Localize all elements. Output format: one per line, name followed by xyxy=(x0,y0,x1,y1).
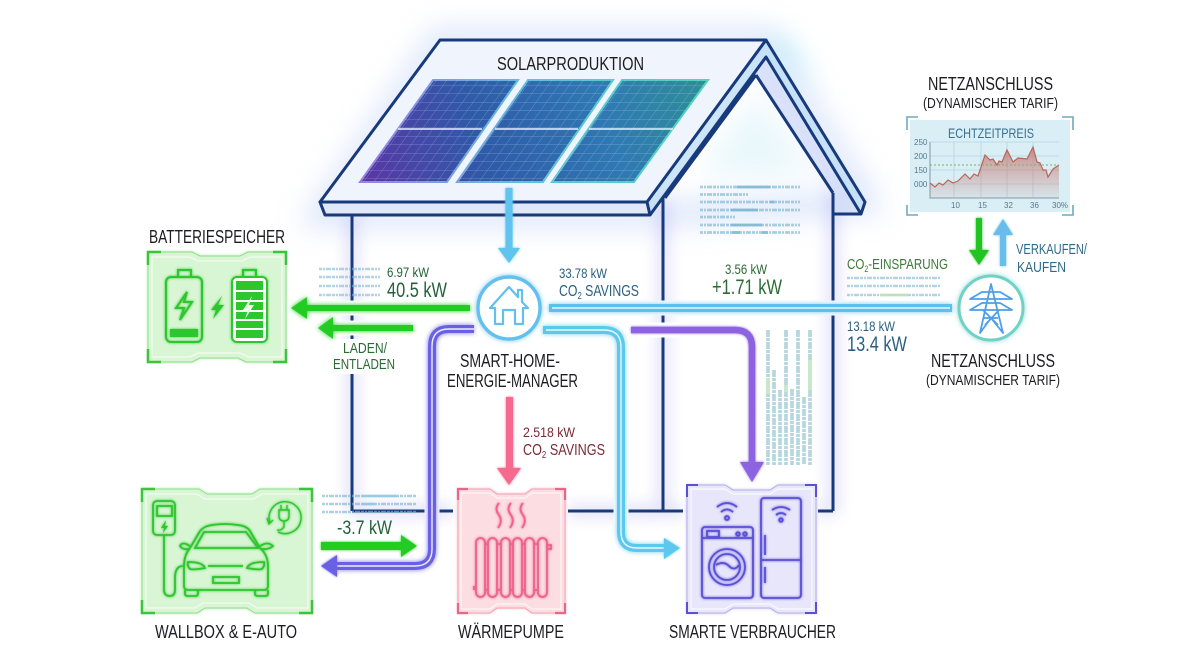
readout: grid: 13.18 kW xyxy=(847,318,896,334)
label: CO2 saving: -EINSPARUNG xyxy=(868,256,948,273)
panel: Batteriespeicher xyxy=(148,227,286,362)
readout: house power xyxy=(712,261,782,299)
pipe: to wallbox indigo xyxy=(336,329,474,566)
panel: Waermepumpe xyxy=(458,489,565,642)
label: grid connection xyxy=(926,351,1060,389)
readout: battery: 40.5 kW xyxy=(387,279,447,302)
readout: CO2 savings red: SAVINGS xyxy=(546,442,605,459)
label: energy manager xyxy=(447,351,578,391)
vertical data bars xyxy=(768,330,810,465)
line chart: 150 xyxy=(914,166,928,175)
label: sell and buy: VERKAUFEN/ xyxy=(1016,241,1088,258)
solar panels xyxy=(360,80,708,182)
icon: wifi left xyxy=(717,503,737,520)
label: charge xyxy=(333,340,395,373)
icon: grid pylon xyxy=(959,276,1023,340)
icon: car xyxy=(180,524,273,596)
readout: CO2 savings red: 2 xyxy=(542,450,547,461)
pipe: to appliances cyan xyxy=(543,330,666,548)
title: Solarproduktion: SOLARPRODUKTION xyxy=(497,54,644,74)
line chart: 32 xyxy=(1004,201,1013,210)
line chart: 200 xyxy=(914,152,928,161)
white backing for charge label xyxy=(333,339,395,374)
readout: battery xyxy=(387,264,447,302)
frame xyxy=(148,252,286,362)
readout: CO2 savings blue: 2 xyxy=(577,291,582,302)
arrow: solar to manager xyxy=(498,188,520,263)
line chart: 36 xyxy=(1030,201,1039,210)
readout: CO2 savings blue: CO xyxy=(559,283,583,300)
line chart: 000 xyxy=(914,180,928,189)
label: grid connection: NETZANSCHLUSS xyxy=(931,351,1055,371)
data rows: grid xyxy=(847,278,940,295)
arrows: battery charge and discharge xyxy=(291,297,470,339)
heading: SMARTE VERBRAUCHER xyxy=(669,622,836,642)
readout: CO2 savings red: 2.518 kW xyxy=(523,424,576,440)
readout: CO2 savings blue xyxy=(559,265,639,302)
readout: battery: 6.97 kW xyxy=(387,264,430,280)
heading: WALLBOX & E-AUTO xyxy=(155,622,297,642)
label: energy manager: SMART-HOME- xyxy=(460,351,560,371)
readout: wallbox: -3.7 kW xyxy=(337,518,392,539)
frame xyxy=(458,489,565,613)
readout: grid: 13.4 kW xyxy=(847,333,907,356)
line chart: 10 xyxy=(951,201,960,210)
icon: plug xyxy=(267,502,301,534)
arrow: buy from grid xyxy=(969,218,989,265)
energy pipes xyxy=(336,308,952,566)
icon: full battery xyxy=(232,270,267,342)
label: energy manager: ENERGIE-MANAGER xyxy=(447,371,578,391)
panel: dynamic tariff xyxy=(907,74,1073,215)
label: charge: ENTLADEN xyxy=(333,356,395,373)
data rows: wallbox xyxy=(322,496,417,512)
arrow: to heat pump xyxy=(497,397,521,485)
icon: charge bolt xyxy=(211,296,224,319)
arrow: to wallbox xyxy=(321,535,417,557)
line chart xyxy=(914,138,1068,210)
pipe: grid line xyxy=(549,304,952,312)
panel: Wallbox xyxy=(142,489,312,642)
heading: (DYNAMISCHER TARIF) xyxy=(923,96,1058,112)
frame xyxy=(142,489,312,613)
white gaps behind flow lines xyxy=(291,308,952,566)
heading: BATTERIESPEICHER xyxy=(149,227,285,247)
data rows: house xyxy=(700,187,800,232)
arrow: sell to grid xyxy=(993,219,1013,266)
label: grid connection: (DYNAMISCHER TARIF) xyxy=(926,373,1060,389)
frame xyxy=(687,485,816,613)
heading xyxy=(923,74,1058,112)
panel: Smarte Verbraucher xyxy=(669,485,836,642)
label: charge: LADEN/ xyxy=(343,340,388,357)
readout: CO2 savings red: CO xyxy=(523,442,547,459)
background glow xyxy=(320,40,865,511)
icon: energy manager xyxy=(478,277,540,339)
line chart: 15 xyxy=(978,201,987,210)
line chart: 250 xyxy=(914,138,928,147)
readout: CO2 savings blue: SAVINGS xyxy=(582,283,639,300)
house structure xyxy=(320,40,865,511)
label: CO2 saving: 2 xyxy=(864,264,868,274)
readout: house power: 3.56 kW xyxy=(725,261,768,277)
chart title: ECHTZEITPREIS xyxy=(948,125,1034,141)
icon: wifi right xyxy=(772,507,790,522)
readout: house power: +1.71 kW xyxy=(712,276,782,299)
line chart: 30% xyxy=(1052,201,1068,210)
readout: CO2 savings red xyxy=(523,424,605,461)
pipe: to appliances violet xyxy=(631,330,752,464)
icon: radiator xyxy=(474,503,551,597)
frame xyxy=(907,117,1073,215)
label: sell and buy xyxy=(1016,241,1088,276)
heading: WÄRMEPUMPE xyxy=(458,622,564,642)
arrow heads on pipes xyxy=(321,462,764,577)
label: CO2 saving: CO xyxy=(847,256,870,273)
readout: CO2 savings blue: 33.78 kW xyxy=(559,265,608,281)
label: sell and buy: KAUFEN xyxy=(1017,259,1066,276)
icon: fridge xyxy=(761,498,801,598)
heading: NETZANSCHLUSS xyxy=(928,74,1053,94)
readout: grid xyxy=(847,318,907,356)
icon: empty battery xyxy=(166,270,202,342)
data rows: battery xyxy=(319,269,380,295)
icon: washing machine xyxy=(702,527,753,598)
icon: charger xyxy=(153,501,183,596)
